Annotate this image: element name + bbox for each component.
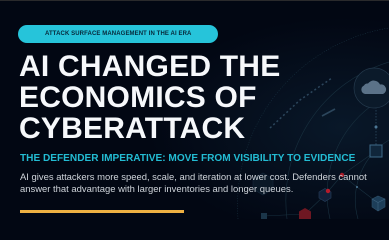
icon: hexagon outline [253, 173, 273, 195]
title: AI CHANGED THE [19, 50, 280, 83]
icon: red dot [340, 173, 344, 177]
body text: AI gives attackers more speed, scale, and iteration at lower cost. Defenders cannot [20, 172, 367, 183]
title: ECONOMICS OF [19, 81, 257, 114]
icon: square node bottom [261, 213, 267, 219]
accent bar [20, 210, 184, 212]
icon: square node [370, 145, 382, 157]
icon: small node right [356, 186, 358, 188]
body text: answer that advantage with larger inventories and longer queues. [20, 184, 293, 195]
icon: cloud [354, 68, 389, 108]
title: CYBERATTACK [19, 112, 245, 145]
subheading: THE DEFENDER IMPERATIVE: MOVE FROM VISIBILITY TO EVIDENCE [20, 153, 355, 164]
icon: small node [374, 126, 378, 128]
icon: dark hexagon [319, 188, 331, 202]
tag pill [18, 25, 218, 43]
icon: red dot [326, 189, 330, 193]
tag label: ATTACK SURFACE MANAGEMENT IN THE AI ERA [45, 30, 191, 36]
icon: cube [372, 196, 385, 211]
title [19, 50, 280, 145]
icon: red hexagon [299, 208, 311, 219]
